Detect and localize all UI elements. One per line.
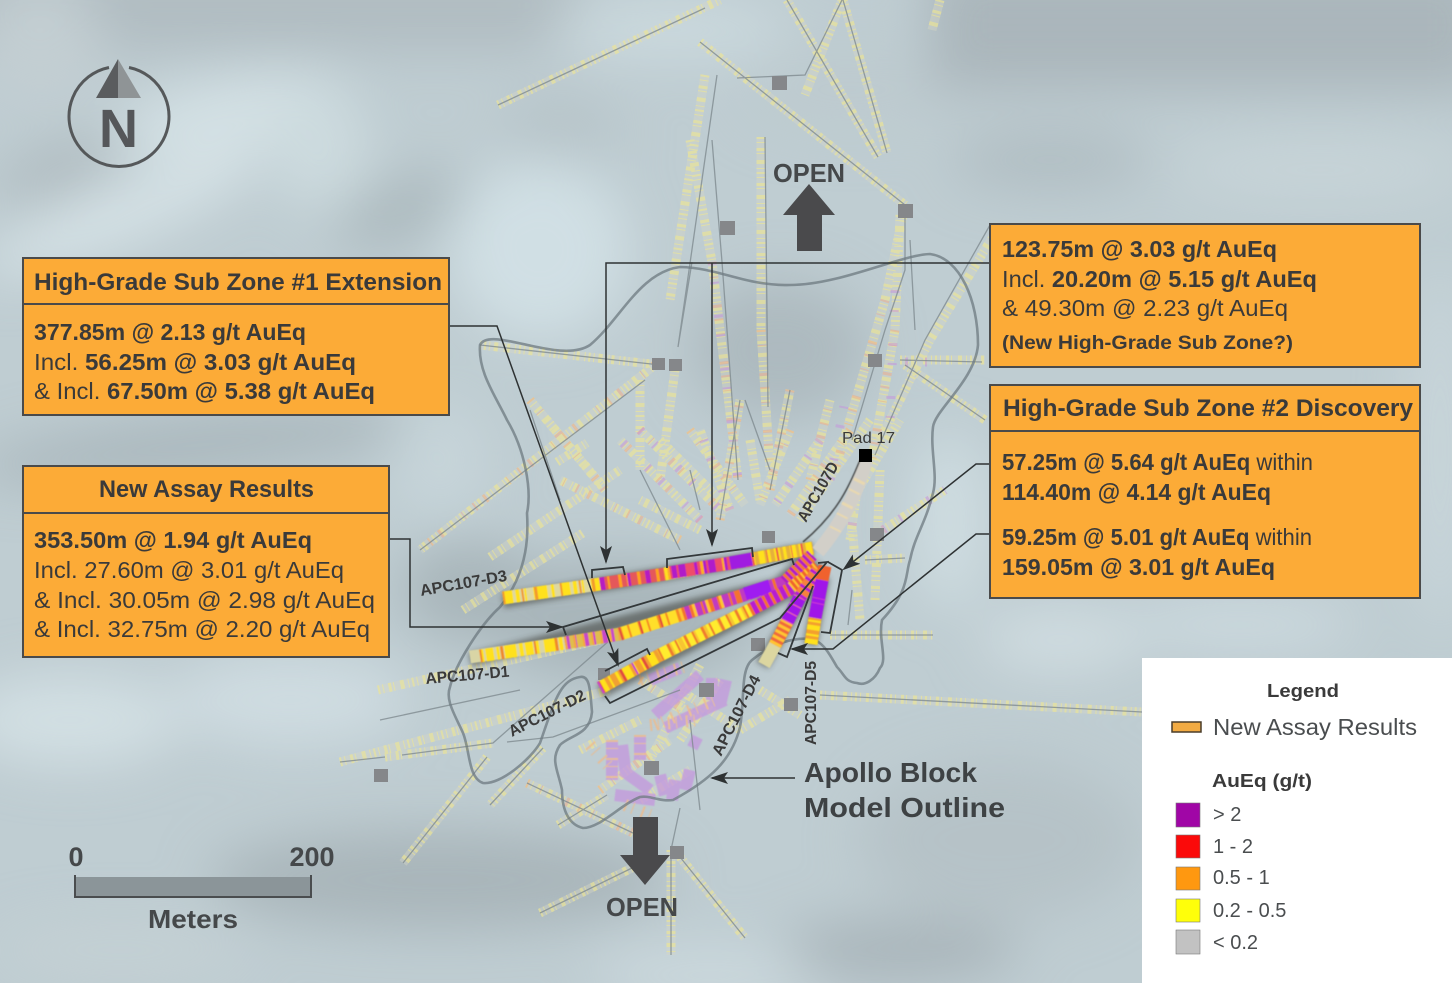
Apollo block model label: Apollo Block	[804, 757, 977, 788]
Apollo block model label: Model Outline	[804, 792, 1005, 823]
drill hole labels: APC107D	[795, 459, 842, 525]
north arrow icon	[69, 59, 169, 166]
drill hole labels: APC107-D3	[419, 568, 508, 600]
Apollo block model outline	[449, 254, 978, 828]
drill hole labels	[419, 459, 842, 759]
intercept text: 377.85m @ 2.13 g/t AuEq	[34, 319, 306, 345]
drill hole labels: APC107-D5	[803, 661, 820, 745]
brackets around new assay intervals	[563, 548, 842, 703]
drill hole shadow	[470, 549, 823, 692]
intercept text: & Incl. 67.50m @ 5.38 g/t AuEq	[34, 378, 375, 404]
drill hole labels: APC107-D4	[709, 673, 765, 759]
drill hole labels: APC107-D1	[425, 664, 510, 688]
scale bar	[68, 842, 335, 934]
north arrow icon: N	[99, 99, 138, 159]
Apollo block model label	[804, 757, 1005, 823]
OPEN south label and arrow: OPEN	[606, 892, 678, 922]
intercept text: 57.25m @ 5.64 g/t AuEq within	[1002, 449, 1313, 475]
heading: New Assay Results	[99, 476, 314, 503]
OPEN north label and arrow	[773, 158, 845, 251]
intercept text: 114.40m @ 4.14 g/t AuEq	[1002, 479, 1271, 505]
panel: new high-grade sub zone intercepts	[990, 224, 1420, 367]
OPEN south label and arrow	[606, 817, 678, 922]
OPEN north label and arrow: OPEN	[773, 158, 845, 188]
legend scale: < 0.2	[1213, 932, 1258, 954]
legend scale	[1176, 803, 1286, 954]
legend scale: 0.2 - 0.5	[1213, 900, 1286, 922]
legend scale: > 2	[1213, 804, 1241, 826]
legend panel	[1142, 658, 1452, 983]
intercept text: 59.25m @ 5.01 g/t AuEq within	[1002, 524, 1312, 550]
leader lines	[389, 263, 990, 778]
drill hole labels: APC107-D2	[506, 687, 589, 741]
new assay swatch: New Assay Results	[1213, 714, 1417, 740]
scale bar: Meters	[148, 904, 238, 934]
hole APC107-D1	[470, 555, 812, 657]
pad 17 marker	[842, 430, 895, 462]
historic drill holes, faint	[340, 0, 1142, 955]
panel: High-Grade Sub Zone 2 Discovery	[990, 385, 1420, 598]
intercept text	[34, 527, 375, 642]
legend title: Legend	[1267, 681, 1339, 701]
intercept text	[1002, 449, 1313, 580]
intercept text: Incl. 56.25m @ 3.03 g/t AuEq	[34, 349, 356, 375]
scale bar: 200	[289, 842, 335, 872]
intercept text: & Incl. 32.75m @ 2.20 g/t AuEq	[34, 616, 370, 642]
heading: High-Grade Sub Zone #2 Discovery	[1003, 395, 1414, 422]
hole APC107-D5	[811, 566, 825, 644]
panel: New Assay Results	[23, 466, 389, 657]
panel: new high-grade sub zone intercepts: (New High-Grade Sub Zone?)	[1002, 333, 1293, 354]
panel: new high-grade sub zone intercepts: 123.75m @ 3.03 g/t AuEq	[1002, 236, 1277, 262]
AuEq heading: AuEq (g/t)	[1212, 771, 1312, 791]
hole APC107-D2	[600, 567, 818, 688]
lavender high-grade cluster	[590, 665, 726, 815]
pad 17 marker: Pad 17	[842, 430, 895, 447]
panel: High-Grade Sub Zone 1 Extension	[23, 258, 449, 415]
collar trace APC107D	[803, 460, 866, 552]
panel: new high-grade sub zone intercepts: Incl. 20.20m @ 5.15 g/t AuEq	[1002, 266, 1317, 292]
heading: High-Grade Sub Zone #1 Extension	[34, 269, 442, 296]
intercept text: 159.05m @ 3.01 g/t AuEq	[1002, 554, 1275, 580]
hole APC107-D3	[503, 548, 813, 598]
scale bar: 0	[68, 842, 84, 872]
new drill holes	[470, 460, 866, 688]
drill pads	[374, 76, 913, 859]
intercept text: & Incl. 30.05m @ 2.98 g/t AuEq	[34, 587, 375, 613]
panel: new high-grade sub zone intercepts: & 49.30m @ 2.23 g/t AuEq	[1002, 295, 1288, 321]
hole APC107-D4	[764, 570, 818, 665]
intercept text: Incl. 27.60m @ 3.01 g/t AuEq	[34, 557, 344, 583]
intercept text	[34, 319, 375, 404]
intercept text: 353.50m @ 1.94 g/t AuEq	[34, 527, 312, 553]
legend scale: 1 - 2	[1213, 836, 1253, 858]
legend scale: 0.5 - 1	[1213, 867, 1270, 889]
